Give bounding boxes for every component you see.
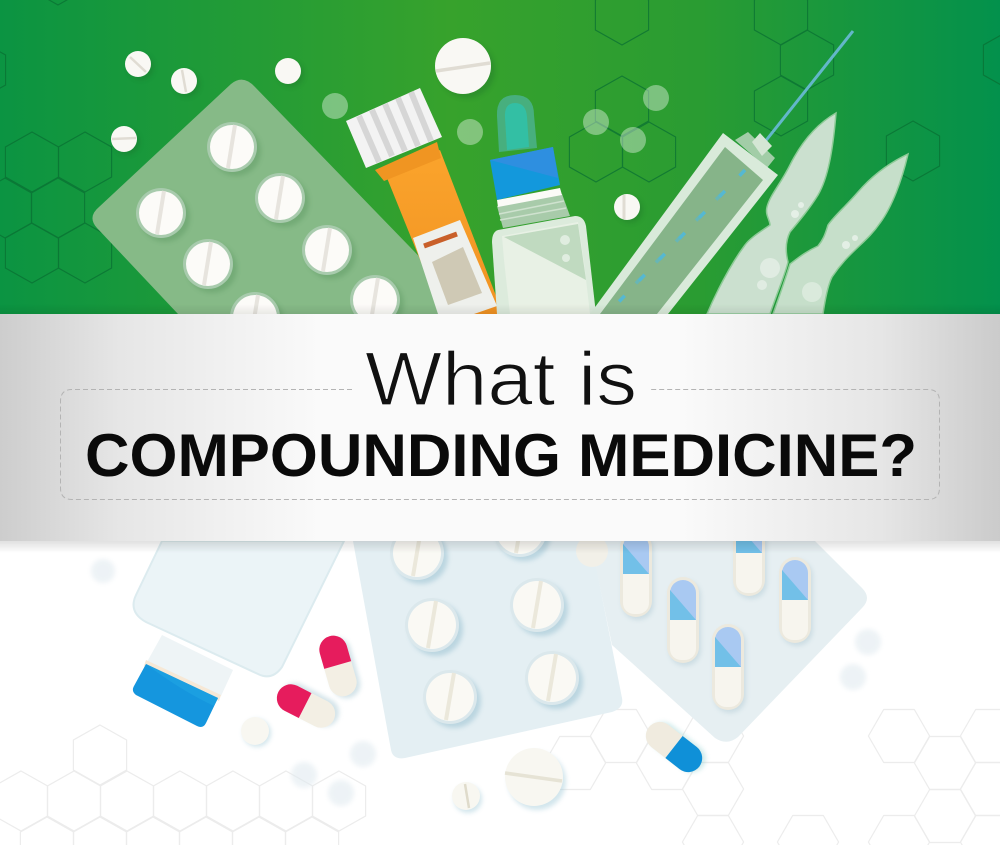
glass ampoules bbox=[707, 113, 908, 314]
translucent dots bbox=[322, 85, 669, 153]
loose white tablets on green bbox=[111, 38, 643, 223]
title banner bbox=[0, 314, 1000, 541]
green blister pack bbox=[92, 80, 440, 346]
hexagon pattern: green header bbox=[0, 0, 1000, 283]
dashed frame bbox=[60, 390, 940, 500]
title: compounding medicine: COMPOUNDING MEDICINE? bbox=[85, 422, 917, 489]
pale capsule blister pack bbox=[596, 510, 867, 742]
loose white tablets on white bbox=[241, 717, 566, 813]
pale tablet blister pack bbox=[353, 503, 622, 758]
lower hexagon pattern bbox=[0, 710, 1000, 845]
blue and white capsule bbox=[640, 715, 711, 780]
red and white capsules bbox=[272, 632, 364, 734]
syringe bbox=[590, 31, 853, 314]
dropper bottle bbox=[490, 95, 596, 314]
fallen glass bottle with blue cap bbox=[133, 541, 344, 727]
band shadows bbox=[0, 304, 1000, 553]
orange prescription bottle bbox=[346, 88, 503, 314]
green header background bbox=[0, 0, 1000, 315]
faint translucent dots bbox=[91, 559, 881, 806]
title: what is: What is bbox=[365, 337, 637, 422]
